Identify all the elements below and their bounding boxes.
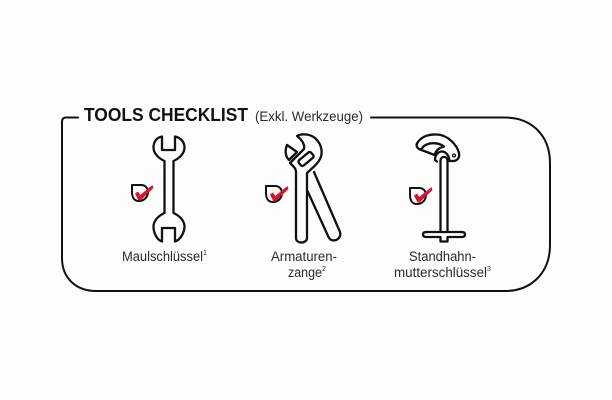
footnote 1: 1 (203, 250, 207, 257)
title: TOOLS CHECKLIST (84, 105, 248, 125)
tool: Standhahnmutterschlüssel (394, 134, 491, 280)
tool: Maulschlüssel (122, 136, 207, 264)
subtitle: (Exkl. Werkzeuge) (255, 109, 363, 124)
label: Maulschlüssel (122, 249, 203, 264)
icon: open-end wrench (154, 136, 184, 242)
tool: Armaturenzange (266, 134, 340, 280)
tool: Armaturenzange: zange (288, 265, 322, 280)
tool: Standhahnmutterschlüssel: mutterschlüssel (394, 265, 487, 280)
label: Armaturen- (271, 249, 337, 264)
panel frame (62, 118, 550, 291)
label: Standhahn- (409, 249, 476, 264)
footnote 2: 2 (322, 266, 326, 273)
icon: checked shield (132, 185, 154, 201)
footnote 3: 3 (487, 266, 491, 273)
icon: checked shield (266, 186, 288, 202)
icon: stopcock key (417, 134, 465, 242)
icon: water pump pliers (286, 134, 340, 242)
icon: checked shield (410, 187, 432, 204)
